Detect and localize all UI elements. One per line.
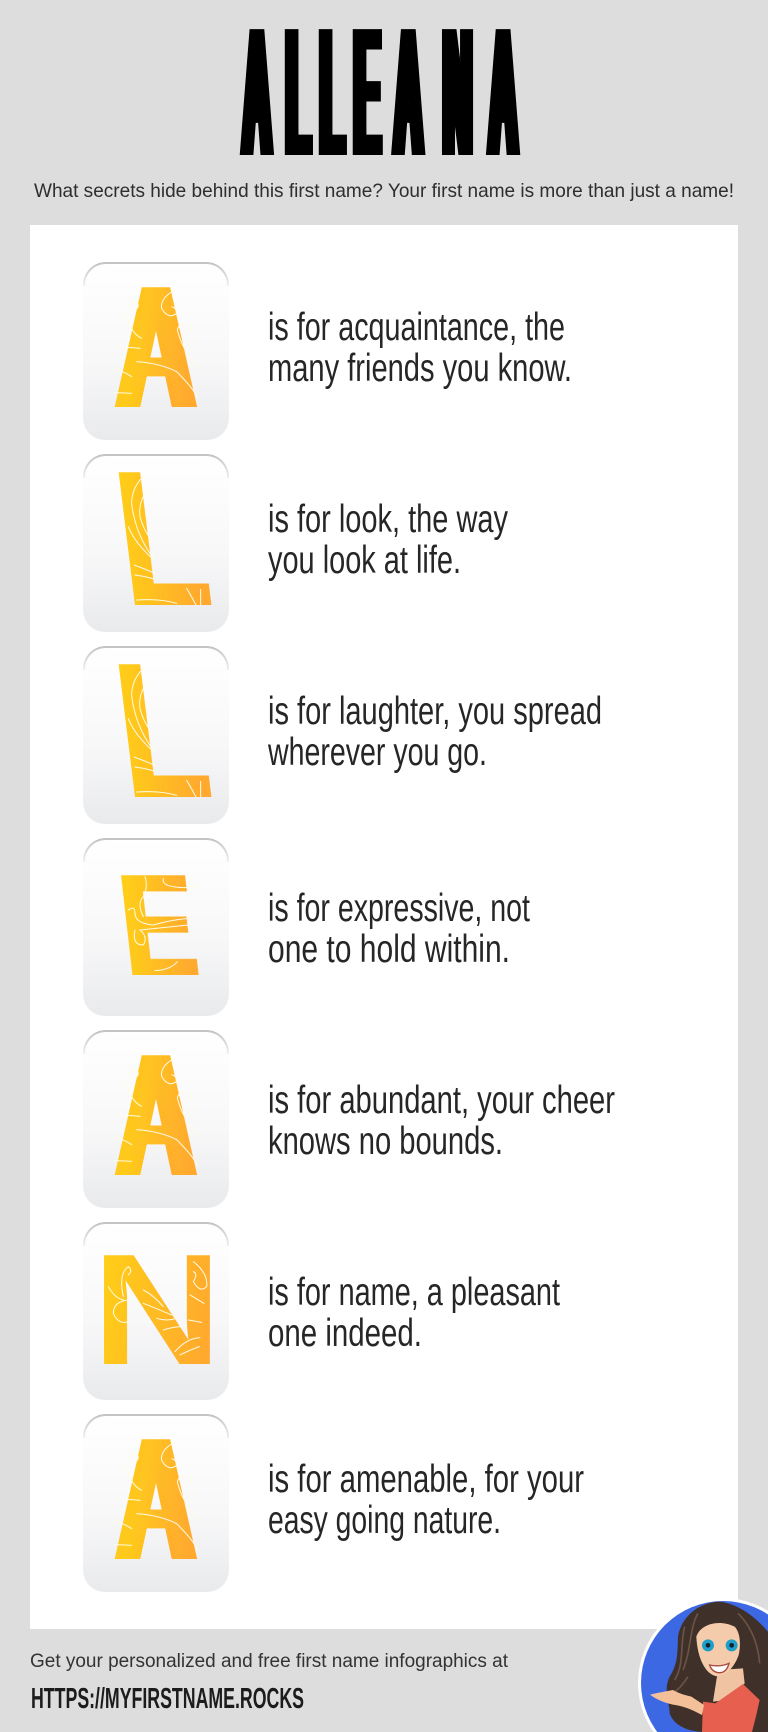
text: A line: easy going nature. [268,1499,501,1542]
text: E line: is for expressive, not [268,887,530,930]
tile with letter A: A [117,249,195,444]
tile with letter L: L [104,624,221,839]
text: N line [268,1271,560,1355]
text: A line [268,1079,615,1163]
eyes [702,1639,714,1651]
row 1: A [83,249,572,444]
subtitle: What secrets hide behind this first name? Your first name is more than just a name! [34,180,734,202]
text: L line [267,690,602,774]
text: E line: one to hold within. [268,928,510,971]
row 5: A [83,1017,615,1212]
icon: avatar woman in blue circle [638,1598,768,1732]
text: L line: wherever you go. [267,731,487,774]
mouth [710,1663,729,1673]
tile with letter L: L [104,432,221,647]
text: L line: is for laughter, you spread [268,690,602,733]
text: N line: one indeed. [268,1312,422,1355]
row 4: E [83,838,530,1016]
text: A line: is for amenable, for your [268,1458,584,1501]
row 6: N [83,1222,560,1400]
arm and hand [650,1690,704,1715]
text: A line: is for abundant, your cheer [268,1079,615,1122]
text: A line: many friends you know. [268,347,572,390]
tile with letter A: A [117,1017,195,1212]
text: A line [268,306,572,390]
text: L line: you look at life. [268,539,461,582]
panel: letter list [30,225,738,1629]
row 7: A [83,1401,584,1596]
text: L line [268,498,509,582]
text: A line: knows no bounds. [268,1120,503,1163]
text: A line: is for acquaintance, the [268,306,565,349]
tile with letter A: A [117,1401,195,1596]
neck [713,1668,745,1702]
face [696,1623,740,1676]
shirt [702,1684,760,1732]
footer url: HTTPS://MYFIRSTNAME.ROCKS [31,1683,304,1715]
tile with letter N: N [92,1222,222,1398]
hair [667,1602,768,1732]
text: A line [268,1458,584,1542]
footer invitation text: Get your personalized and free first name infographics at [30,1651,509,1672]
row 3: L [83,624,602,839]
text: N line: is for name, a pleasant [268,1271,560,1314]
text: E line [268,887,530,971]
text: L line: is for look, the way [268,498,509,541]
tile with letter E: E [112,843,205,1006]
row 2: L [83,432,509,647]
